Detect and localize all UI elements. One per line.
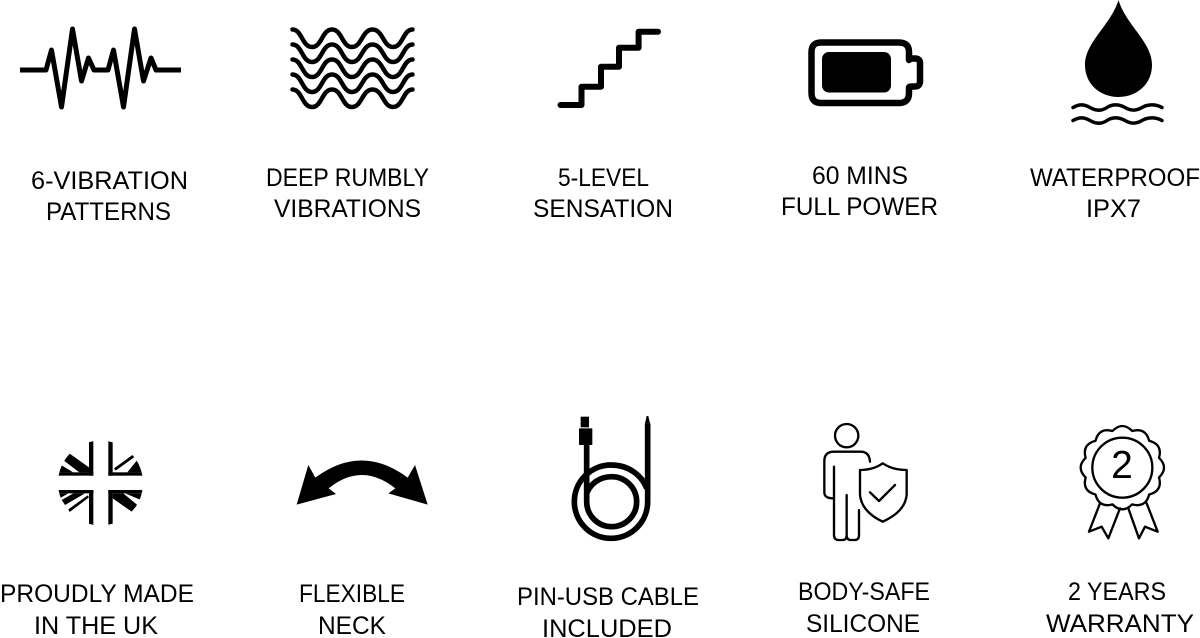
panel: body-safe silicone: [798, 424, 930, 638]
icon: union flag roundel: [57, 440, 147, 527]
label: flexible neck: FLEXIBLE: [299, 580, 405, 608]
panel: 5-level sensation: [533, 32, 673, 223]
label: 6-vibration patterns: 6-VIBRATION: [31, 167, 188, 195]
label: 5-level sensation: SENSATION: [533, 195, 673, 223]
icon: water drop with waves: [1073, 0, 1162, 123]
icon: warranty rosette: [1073, 418, 1172, 538]
label: 2 years warranty: 2 YEARS: [1068, 578, 1166, 606]
label: deep rumbly vibrations: DEEP RUMBLY: [266, 164, 429, 192]
icon: warranty rosette: 2: [1111, 444, 1133, 487]
label: body-safe silicone: BODY-SAFE: [798, 578, 930, 606]
label: 5-level sensation: [533, 164, 673, 223]
label: 6-vibration patterns: PATTERNS: [46, 198, 171, 226]
icon: pulse waveform: [20, 29, 181, 107]
panel: deep rumbly vibrations: [266, 30, 429, 223]
label: 2 years warranty: [1046, 578, 1194, 638]
label: deep rumbly vibrations: VIBRATIONS: [274, 195, 421, 223]
panel: 60 mins full power: [781, 42, 938, 221]
label: pin-USB cable included: PIN-USB CABLE: [517, 583, 699, 611]
label: 60 mins full power: 60 MINS: [812, 162, 908, 190]
label: waterproof IPX7: IPX7: [1086, 195, 1141, 223]
label: 5-level sensation: 5-LEVEL: [558, 164, 649, 192]
panel: 2 years warranty: [1046, 418, 1194, 638]
icon: battery: [812, 42, 920, 103]
icon: coiled cable: [574, 416, 650, 538]
panel: flexible neck: [297, 460, 428, 638]
label: 2 years warranty: WARRANTY: [1046, 610, 1194, 638]
icon: curved double arrow: [297, 460, 428, 505]
panel: pin-USB cable included: [517, 416, 699, 638]
label: body-safe silicone: SILICONE: [806, 610, 920, 638]
label: flexible neck: [299, 580, 405, 638]
icon: stacked waves: [292, 30, 412, 107]
label: body-safe silicone: [798, 578, 930, 638]
panel: 6-vibration patterns: [20, 29, 188, 226]
panel: waterproof IPX7: [1030, 0, 1200, 223]
label: deep rumbly vibrations: [266, 164, 429, 223]
label: 60 mins full power: [781, 162, 938, 221]
label: waterproof IPX7: [1030, 164, 1200, 223]
label: proudly made in the UK: PROUDLY MADE: [0, 580, 194, 608]
label: 60 mins full power: FULL POWER: [781, 193, 938, 221]
label: pin-USB cable included: [517, 583, 699, 638]
label: proudly made in the UK: [0, 580, 194, 638]
icon: staircase: [560, 32, 658, 105]
label: 6-vibration patterns: [31, 167, 188, 226]
icon: person with shield: [824, 424, 907, 540]
panel: proudly made in the UK: [0, 440, 194, 638]
